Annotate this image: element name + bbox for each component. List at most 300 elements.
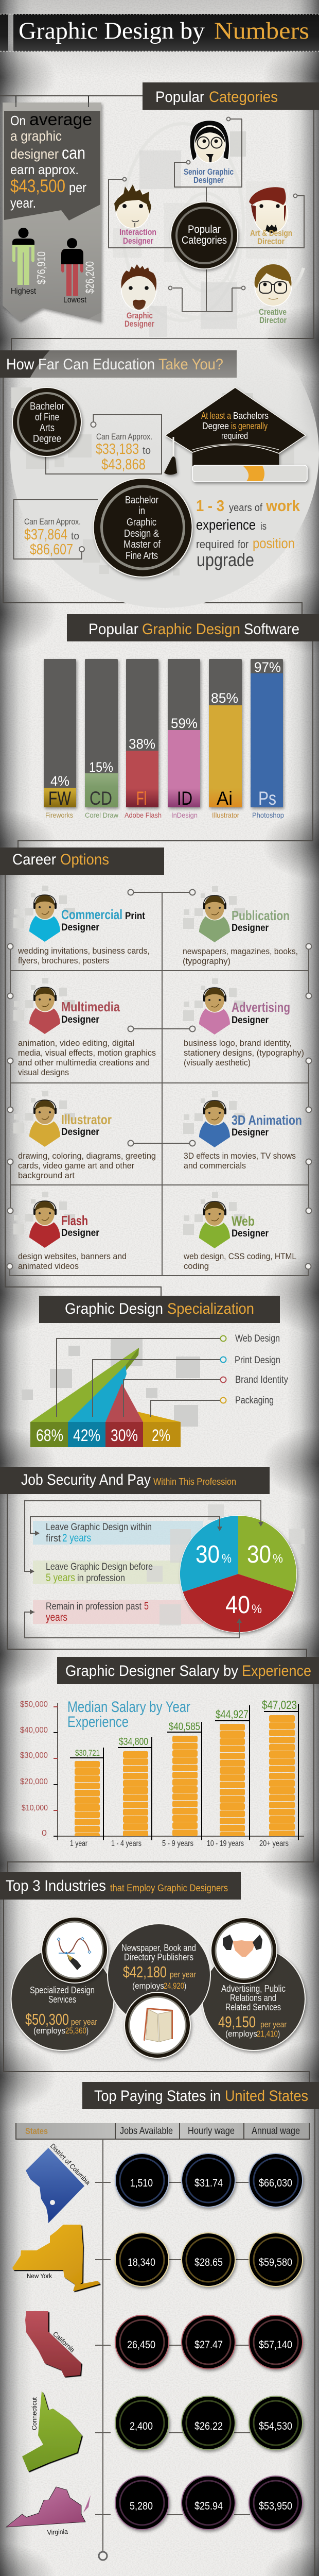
chart: specialization shares: 2%: [152, 1426, 170, 1445]
panel: specialized design services: [11, 1947, 114, 2050]
arrows: job security: [25, 1501, 263, 1638]
career: illustrator designer: background art: [18, 1171, 75, 1180]
bar: Photoshop: [251, 659, 284, 819]
callout: average salary: designer: [10, 146, 59, 162]
heading: graphic designer salary by experience: Experience: [242, 1663, 311, 1680]
bar: Corel Draw: 15%: [89, 759, 113, 775]
career: publication designer: Publication: [232, 908, 290, 923]
stat: hourly $31.74: [182, 2154, 235, 2207]
heading: career options: Career: [12, 851, 56, 868]
y axis: $30,000: [20, 1751, 48, 1760]
section frame lines: [4, 1900, 309, 2082]
bar: 1 year: [70, 1748, 103, 1848]
badge: bachelor in graphic design and master of fine arts: [94, 478, 192, 577]
icon: graduation cap: [164, 387, 307, 482]
text: earnings with master degree: $86,607: [30, 541, 73, 558]
icon: highest earner figure: [12, 228, 34, 285]
career: multimedia designer: visual designs: [18, 1067, 69, 1077]
text: earnings with fine arts degree: $43,868: [101, 456, 146, 473]
career: advertising designer: [183, 978, 304, 1067]
stat: jobs 26,450: [115, 2315, 169, 2369]
pie chart: job security: %: [222, 1552, 232, 1566]
panel: newspaper, book and directory publishers: 24,920: [164, 1981, 184, 1991]
heading: job security and pay: [0, 1467, 270, 1494]
stat: annual $59,580: [249, 2233, 303, 2286]
heading: top 3 industries: [0, 1872, 241, 1900]
label: interaction designer: [119, 227, 156, 246]
section frame lines: [7, 2109, 315, 2576]
section frame lines: [18, 641, 313, 848]
bar: 1 to 4 years: [111, 1736, 152, 1848]
career: publication designer: newspapers, magazines, books,: [183, 946, 298, 956]
panel: newspaper, book and directory publishers: (employs: [132, 1981, 164, 1991]
career: publication designer: Designer: [232, 923, 269, 934]
heading: top paying states: United States: [225, 2088, 308, 2105]
panel: advertising and public relations: [202, 1947, 305, 2050]
bar: 1 year: $30,721: [75, 1748, 100, 1758]
career: flash designer: animated videos: [18, 1261, 79, 1271]
badge: bachelor of fine arts: Degree: [33, 433, 61, 445]
badge: bachelor of fine arts: [12, 387, 81, 456]
callout: average salary: average: [29, 110, 92, 129]
row: New York: [12, 2225, 303, 2291]
career: advertising designer: Designer: [232, 1015, 269, 1026]
bar: Fireworks: FW: [48, 788, 71, 809]
decorative background of categories: [113, 124, 304, 337]
map: District of Columbia: District of Columbia: [49, 2142, 92, 2187]
text: earnings with fine arts degree: to: [143, 445, 151, 456]
job security legend bands: Leave Graphic Design before: [46, 1562, 153, 1572]
label: graphic designer: Designer: [125, 319, 154, 329]
job security legend bands: in profession: [77, 1573, 125, 1584]
text: degree requirement: At least a: [201, 411, 232, 421]
y axis: [20, 1700, 304, 1840]
bar: InDesign: 59%: [171, 716, 198, 731]
label: interaction designer: Interaction: [119, 227, 156, 237]
panel: specialized design services: 25,360: [65, 2026, 86, 2036]
pie chart: job security: %: [273, 1552, 283, 1566]
heading: Popular Categories: [143, 82, 319, 110]
icon: handshake: [211, 1918, 277, 1984]
job security legend bands: years: [46, 1612, 67, 1623]
career: multimedia designer: and other multimedia creations and: [18, 1058, 150, 1067]
panel: average salary ribbon: $26,200: [83, 261, 96, 294]
map: Connecticut: Connecticut: [30, 2397, 38, 2430]
stat: hourly $28.65: $28.65: [194, 2257, 223, 2268]
icon: art and design director face: [249, 187, 288, 233]
career: multimedia designer: Designer: [61, 1014, 100, 1025]
map: California: [25, 2311, 81, 2377]
bar: 10 to 19 years: [207, 1705, 250, 1848]
bar: Fireworks: 4%: [50, 773, 69, 789]
bar: Corel Draw: Corel Draw: [85, 811, 119, 819]
callout: average salary: year.: [10, 195, 36, 211]
text: work experience: for: [238, 538, 249, 551]
text: work experience: [196, 497, 300, 570]
panel: specialized design services: ): [86, 2026, 88, 2036]
chart: specialization shares: Brand Identity: [235, 1375, 288, 1385]
career grid lines: [5, 875, 312, 1296]
label: senior graphic designer: Senior Graphic: [184, 167, 234, 177]
bar: 1 year: 1 year: [70, 1839, 88, 1848]
panel: specialized design services: per year: [71, 2017, 97, 2027]
callout: average salary: a graphic: [10, 128, 62, 144]
career: flash designer: Flash: [61, 1213, 88, 1228]
heading: popular graphic design software: Popular: [88, 621, 138, 638]
chart title: Experience: [67, 1714, 129, 1731]
icon: lowest earner figure: [61, 238, 83, 296]
table header: states: Hourly wage: [188, 2126, 235, 2137]
bar: 5 to 9 years: $40,585: [169, 1721, 200, 1733]
label: creative director: Director: [259, 315, 287, 325]
connectors: categories: [109, 117, 304, 312]
panel: advertising and public relations: Related Services: [225, 2002, 281, 2012]
callout: average salary: $43,500: [10, 176, 65, 196]
chart: specialization shares: Print Design: [235, 1355, 280, 1366]
stat: hourly $26.22: $26.22: [194, 2420, 223, 2432]
text: earnings with fine arts degree: [96, 432, 152, 473]
badge: bachelor in graphic design and master of fine arts: in: [138, 505, 145, 517]
job security legend bands: first: [46, 1533, 61, 1544]
career: advertising designer: (visually aesthetic): [184, 1058, 251, 1067]
career: web designer: Web: [232, 1213, 255, 1229]
heading: top paying states: [82, 2082, 319, 2109]
table header: states: Jobs Available: [120, 2126, 173, 2137]
job security legend bands: [33, 1504, 305, 1625]
bar: 1 to 4 years: $34,800: [119, 1736, 148, 1748]
stat: hourly $26.22: [182, 2396, 235, 2450]
icon: pen tool curve: [42, 1917, 108, 1983]
heading: career options: Options: [60, 851, 109, 868]
career: web designer: Designer: [232, 1228, 269, 1239]
stat: annual $66,030: $66,030: [259, 2177, 292, 2189]
bar: InDesign: InDesign: [171, 811, 198, 819]
text: degree requirement: Degree: [202, 421, 229, 431]
map: New York: [12, 2225, 100, 2291]
text: work experience: years of: [229, 502, 262, 514]
chart: specialization shares: 42%: [73, 1426, 100, 1445]
stat: jobs 18,340: [115, 2233, 169, 2286]
title banner: [0, 14, 319, 52]
panel: specialized design services: Specialized Design: [30, 1985, 95, 1995]
heading: Popular Categories: Categories: [209, 89, 278, 106]
career: commercial print designer: [13, 886, 150, 965]
text: work experience: required: [196, 538, 234, 551]
section frame lines: [8, 1684, 314, 1872]
stat: annual $53,950: $53,950: [259, 2500, 292, 2512]
stat: hourly $25.94: $25.94: [194, 2500, 223, 2512]
icon: interaction designer face: [114, 184, 151, 228]
row: Connecticut: [22, 2391, 303, 2471]
text: degree requirement: required: [221, 431, 248, 441]
stat: jobs 1,510: [115, 2154, 169, 2207]
badge: bachelor in graphic design and master of fine arts: Design &: [124, 528, 160, 539]
stat: annual $54,530: [249, 2396, 303, 2450]
career: multimedia designer: Multimedia: [61, 999, 120, 1014]
text: earnings with fine arts degree: $33,183: [96, 441, 139, 457]
heading: graphic design specialization: Graphic Design: [65, 1300, 163, 1317]
career: commercial print designer: Designer: [61, 922, 100, 933]
stat: jobs 5,280: [115, 2476, 169, 2530]
panel: newspaper, book and directory publishers: $42,180: [123, 1963, 167, 1981]
career: commercial print designer: Commercial: [61, 907, 122, 922]
label: graphic designer: Graphic: [127, 311, 153, 320]
icon: creative director face: [255, 264, 292, 306]
panel: advertising and public relations: per year: [260, 2020, 287, 2029]
text: earnings with master degree: Can Earn Approx.: [24, 517, 81, 527]
stat: annual $59,580: $59,580: [259, 2257, 292, 2268]
career: illustrator designer: Illustrator: [61, 1112, 112, 1127]
badge: bachelor in graphic design and master of fine arts: Fine Arts: [126, 550, 158, 562]
section frame lines: [7, 1494, 307, 1657]
label: senior graphic designer: [184, 167, 234, 185]
title banner: Numbers: [214, 18, 309, 44]
bar: Photoshop: Ps: [258, 788, 276, 809]
career: publication designer: [183, 886, 298, 966]
icon: senior graphic designer face: [190, 121, 229, 163]
heading: career options: [0, 848, 164, 875]
career: 3D animation designer: 3D effects in movies, TV shows: [184, 1151, 296, 1161]
table header: states: States: [25, 2126, 48, 2136]
stat: hourly $25.94: [182, 2476, 235, 2530]
label: art and design director: [250, 228, 292, 246]
bar: Adobe Flash: 38%: [129, 736, 155, 752]
bar: Adobe Flash: Adobe Flash: [125, 811, 162, 819]
bar: Fireworks: [44, 659, 76, 819]
panel: average salary ribbon: $76,910: [35, 251, 48, 284]
career: multimedia designer: animation, video editing, digital: [18, 1038, 134, 1048]
stat: jobs 2,400: [115, 2396, 169, 2450]
heading: graphic design specialization: [39, 1296, 280, 1323]
job security legend bands: 2 years: [62, 1532, 91, 1544]
section frame lines: [0, 96, 314, 614]
text: work experience: is: [260, 521, 267, 532]
career: commercial print designer: Print: [125, 911, 146, 922]
text: degree requirement: is generally: [231, 421, 268, 431]
pie chart: job security: %: [252, 1602, 262, 1616]
map: New York: New York: [27, 2272, 52, 2280]
text: work experience: upgrade: [197, 549, 254, 570]
job security legend bands: Remain in profession past: [46, 1601, 142, 1612]
y axis: 0: [42, 1829, 47, 1838]
bar: Illustrator: Illustrator: [212, 811, 239, 819]
career: flash designer: design websites, banners and: [18, 1251, 127, 1261]
icon: graphic designer face: [121, 264, 156, 310]
bar: 20 plus years: [259, 1698, 298, 1848]
panel: newspaper, book and directory publishers: Newspaper, Book and: [121, 1943, 196, 1953]
badge: bachelor in graphic design and master of fine arts: Master of: [123, 539, 161, 550]
career: publication designer: (typography): [183, 956, 231, 966]
panel: advertising and public relations: 21,410: [257, 2029, 278, 2039]
hub: popular categories: Categories: [182, 234, 227, 246]
career: advertising designer: Advertising: [232, 999, 290, 1015]
career: illustrator designer: Designer: [61, 1127, 100, 1138]
career: 3D animation designer: 3D Animation: [232, 1112, 302, 1128]
map: California: California: [51, 2330, 77, 2354]
career: flash designer: Designer: [61, 1228, 100, 1239]
heading: graphic design specialization: Specialization: [167, 1300, 254, 1317]
text: work experience: position: [253, 535, 295, 551]
career: advertising designer: stationery designs, (typography): [184, 1048, 304, 1058]
stat: hourly $28.65: [182, 2233, 235, 2286]
text: earnings with master degree: [24, 517, 81, 558]
stat: annual $57,140: $57,140: [259, 2339, 292, 2351]
job security legend bands: 5 years: [46, 1572, 75, 1584]
heading: how far can education take you: [0, 350, 237, 378]
bar: Fireworks: Fireworks: [45, 811, 73, 819]
y axis: $10,000: [22, 1804, 48, 1812]
bar: 20 plus years: 20+ years: [259, 1839, 289, 1848]
panel: newspaper, book and directory publishers: per year: [170, 1970, 196, 1979]
hub: popular categories: [171, 202, 238, 269]
heading: graphic designer salary by experience: [57, 1657, 319, 1684]
badge: bachelor of fine arts: Bachelor: [30, 401, 64, 412]
stat: annual $53,950: [249, 2476, 303, 2530]
chart title: [67, 1699, 190, 1731]
career: illustrator designer: drawing, coloring, diagrams, greeting: [18, 1151, 156, 1161]
text: work experience: work: [265, 497, 300, 515]
connector: master earnings: [13, 500, 98, 559]
callout: average salary: [4, 110, 100, 221]
stat: jobs 5,280: 5,280: [130, 2500, 153, 2512]
badge: bachelor of fine arts: of Fine: [35, 412, 59, 423]
bar: Photoshop: Photoshop: [252, 811, 284, 819]
text: work experience: 1 - 3: [196, 497, 224, 515]
bar: 10 to 19 years: 10 - 19 years: [207, 1839, 244, 1848]
chart: median salary by experience: [20, 1698, 304, 1848]
text: earnings with master degree: to: [71, 531, 79, 542]
career: web designer: coding: [184, 1261, 209, 1271]
stat: jobs 1,510: 1,510: [130, 2177, 153, 2189]
heading: popular graphic design software: Graphic Design: [142, 621, 240, 638]
map: District of Columbia: [26, 2142, 92, 2223]
callout: average salary: On: [10, 113, 26, 128]
panel: specialized design services: $50,300: [25, 2010, 69, 2028]
heading: top paying states: Top Paying States in: [94, 2088, 221, 2105]
bar: Adobe Flash: Fl: [136, 788, 147, 809]
bar: Photoshop: 97%: [254, 659, 281, 675]
connector: bachelor of fine arts earnings: [46, 415, 162, 474]
bar: InDesign: [168, 659, 200, 819]
label: creative director: Creative: [259, 307, 287, 317]
panel: average salary ribbon: Highest: [11, 287, 37, 296]
bar: Corel Draw: CD: [90, 788, 112, 809]
label: art and design director: Director: [257, 236, 285, 246]
bar: 10 to 19 years: $44,927: [216, 1708, 249, 1721]
bar: Illustrator: 85%: [211, 690, 238, 706]
heading: how far can education take you: Take You?: [158, 356, 223, 373]
panel: specialized design services: (employs: [33, 2026, 65, 2036]
career: multimedia designer: media, visual effects, motion graphics: [18, 1048, 156, 1058]
bar: InDesign: ID: [177, 788, 192, 809]
badge: bachelor of fine arts: Arts: [40, 422, 55, 434]
heading: top 3 industries: that Employ Graphic Designers: [110, 1883, 228, 1894]
panel: advertising and public relations: 49,150: [218, 2013, 256, 2031]
chart: specialization shares: 30%: [111, 1426, 138, 1445]
panel: advertising and public relations: ): [278, 2029, 280, 2039]
label: creative director: [259, 307, 287, 325]
callout: average salary: earn approx.: [10, 162, 79, 177]
career: web designer: web design, CSS coding, HTML: [183, 1251, 296, 1261]
panel: specialized design services: Services: [48, 1994, 76, 2005]
career: illustrator designer: cards, video game art and other: [18, 1161, 134, 1171]
panel: average salary ribbon: [3, 96, 101, 322]
bar chart: software popularity: [44, 659, 284, 819]
career: web designer: [183, 1192, 296, 1271]
bar: Corel Draw: [85, 659, 119, 819]
career: commercial print designer: flyers, brochures, posters: [18, 956, 109, 965]
chart: specialization shares: [22, 1333, 288, 1447]
icon: open book: [125, 1992, 190, 2058]
y axis: $20,000: [20, 1777, 48, 1786]
label: graphic designer: [125, 311, 154, 329]
y axis: $40,000: [20, 1726, 48, 1735]
chart: specialization shares: Web Design: [235, 1333, 280, 1344]
bar: Adobe Flash: [125, 659, 162, 819]
heading: job security and pay: Within This Profession: [153, 1477, 236, 1487]
label: senior graphic designer: Designer: [193, 175, 224, 185]
badge: bachelor in graphic design and master of fine arts: Graphic: [127, 517, 156, 528]
text: earnings with master degree: $37,864: [24, 527, 67, 543]
map: Virginia: [6, 2487, 91, 2536]
text: degree requirement: [201, 411, 269, 441]
chart: specialization shares: 68%: [36, 1426, 63, 1445]
panel: newspaper, book and directory publishers: [108, 1924, 210, 2027]
pie chart: job security: 30: [196, 1541, 220, 1568]
bar: 1 to 4 years: 1 - 4 years: [111, 1839, 141, 1848]
panel: advertising and public relations: Relations and: [230, 1993, 276, 2003]
text: work experience: experience: [196, 517, 256, 533]
stat: hourly $27.47: [182, 2315, 235, 2369]
heading: Popular Categories: Popular: [155, 89, 204, 106]
heading: job security and pay: Job Security And Pay: [21, 1471, 151, 1488]
badge: bachelor in graphic design and master of fine arts: Bachelor: [125, 495, 158, 506]
job security legend bands: 5: [144, 1600, 149, 1612]
career: 3D animation designer: and commercials: [184, 1161, 246, 1171]
y axis: $50,000: [20, 1700, 48, 1709]
stat: annual $54,530: $54,530: [259, 2420, 292, 2432]
bar: 20 plus years: $47,023: [262, 1698, 297, 1711]
callout: average salary: per: [69, 180, 86, 195]
pie chart: job security: [180, 1515, 297, 1633]
row: Virginia: [6, 2476, 303, 2536]
panel: advertising and public relations: (employs: [225, 2029, 257, 2039]
panel: average salary ribbon: Lowest: [63, 296, 86, 304]
bar: Illustrator: Ai: [217, 788, 233, 809]
map: Virginia: Virginia: [47, 2528, 68, 2536]
map: Connecticut: [22, 2391, 82, 2471]
career: 3D animation designer: [183, 1091, 302, 1171]
pie chart: job security: 40: [225, 1591, 250, 1619]
pie chart: job security: 30: [247, 1541, 271, 1568]
table spine: [99, 2139, 107, 2560]
callout: average salary: can: [62, 143, 85, 162]
stat: annual $57,140: [249, 2315, 303, 2369]
career: commercial print designer: wedding invitations, business cards,: [17, 946, 150, 956]
text: degree requirement: Bachelors: [233, 411, 269, 421]
career: 3D animation designer: Designer: [232, 1127, 269, 1138]
heading: top 3 industries: Top 3 Industries: [6, 1877, 106, 1894]
text: earnings with fine arts degree: Can Earn Approx.: [96, 432, 152, 442]
row: District of Columbia: [26, 2142, 303, 2223]
panel: advertising and public relations: Advertising, Public: [221, 1984, 286, 1994]
table header: states: [16, 2123, 309, 2139]
stat: annual $66,030: [249, 2154, 303, 2207]
bar: 5 to 9 years: 5 - 9 years: [162, 1839, 193, 1848]
stat: hourly $27.47: $27.47: [194, 2339, 223, 2351]
table header: states: Annual wage: [252, 2126, 300, 2137]
career: multimedia designer: [13, 978, 156, 1077]
